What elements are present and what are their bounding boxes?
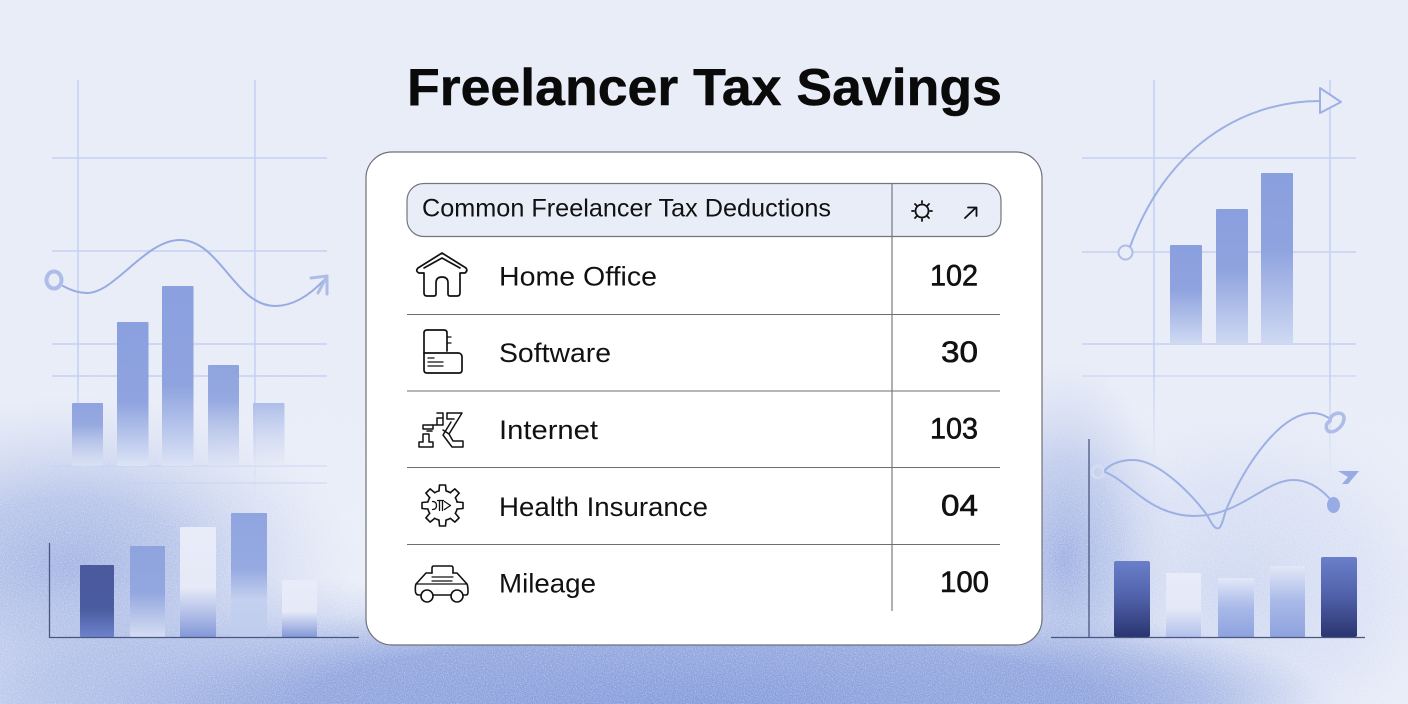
icon: network maze xyxy=(419,413,463,447)
grid lines xyxy=(1082,80,1356,480)
row: home office: 102 xyxy=(930,260,978,292)
icon: sun xyxy=(912,201,932,221)
panel: upper right bar chart xyxy=(1082,80,1356,480)
title: Freelancer Tax Savings xyxy=(407,59,1002,117)
row: home office: Home Office xyxy=(499,262,657,292)
row: internet: Internet xyxy=(499,415,599,445)
axes xyxy=(50,543,359,638)
bars xyxy=(1170,173,1293,344)
bars xyxy=(1114,557,1357,637)
end dot xyxy=(1327,497,1340,513)
row: software xyxy=(424,330,978,373)
row: health insurance: Health Insurance xyxy=(499,492,708,522)
bars xyxy=(72,286,284,466)
icon: car xyxy=(415,566,468,602)
icon: diagonal arrow xyxy=(965,208,976,218)
header title: Common Freelancer Tax Deductions xyxy=(422,194,831,222)
curves xyxy=(1092,413,1344,528)
trend line with arrow xyxy=(46,240,327,306)
rising arrow curve xyxy=(1118,88,1341,260)
panel: lower left bar chart xyxy=(50,513,359,638)
row: mileage xyxy=(415,566,989,602)
panel: deductions table card xyxy=(366,152,1042,645)
row: home office xyxy=(417,253,978,296)
icon: software xyxy=(424,330,462,373)
row: software: Software xyxy=(499,338,611,368)
row: health insurance: 04 xyxy=(941,490,978,522)
background with soft blue haze xyxy=(0,391,1406,704)
icon: house xyxy=(417,253,467,296)
row: internet: 103 xyxy=(930,412,978,446)
row: mileage: Mileage xyxy=(499,568,596,598)
row: software: 30 xyxy=(941,336,978,369)
panel: upper left bar chart xyxy=(40,80,327,500)
grid lines xyxy=(40,80,327,500)
small arrow xyxy=(1338,471,1359,484)
table rules xyxy=(407,183,1000,611)
axes xyxy=(1051,439,1365,638)
table header xyxy=(407,184,1001,236)
panel: lower right chart xyxy=(1051,413,1365,638)
row: mileage: 100 xyxy=(940,566,989,599)
row: internet xyxy=(419,412,978,447)
row: health insurance xyxy=(422,485,978,526)
icon: gear xyxy=(422,485,463,526)
bars xyxy=(80,513,317,637)
